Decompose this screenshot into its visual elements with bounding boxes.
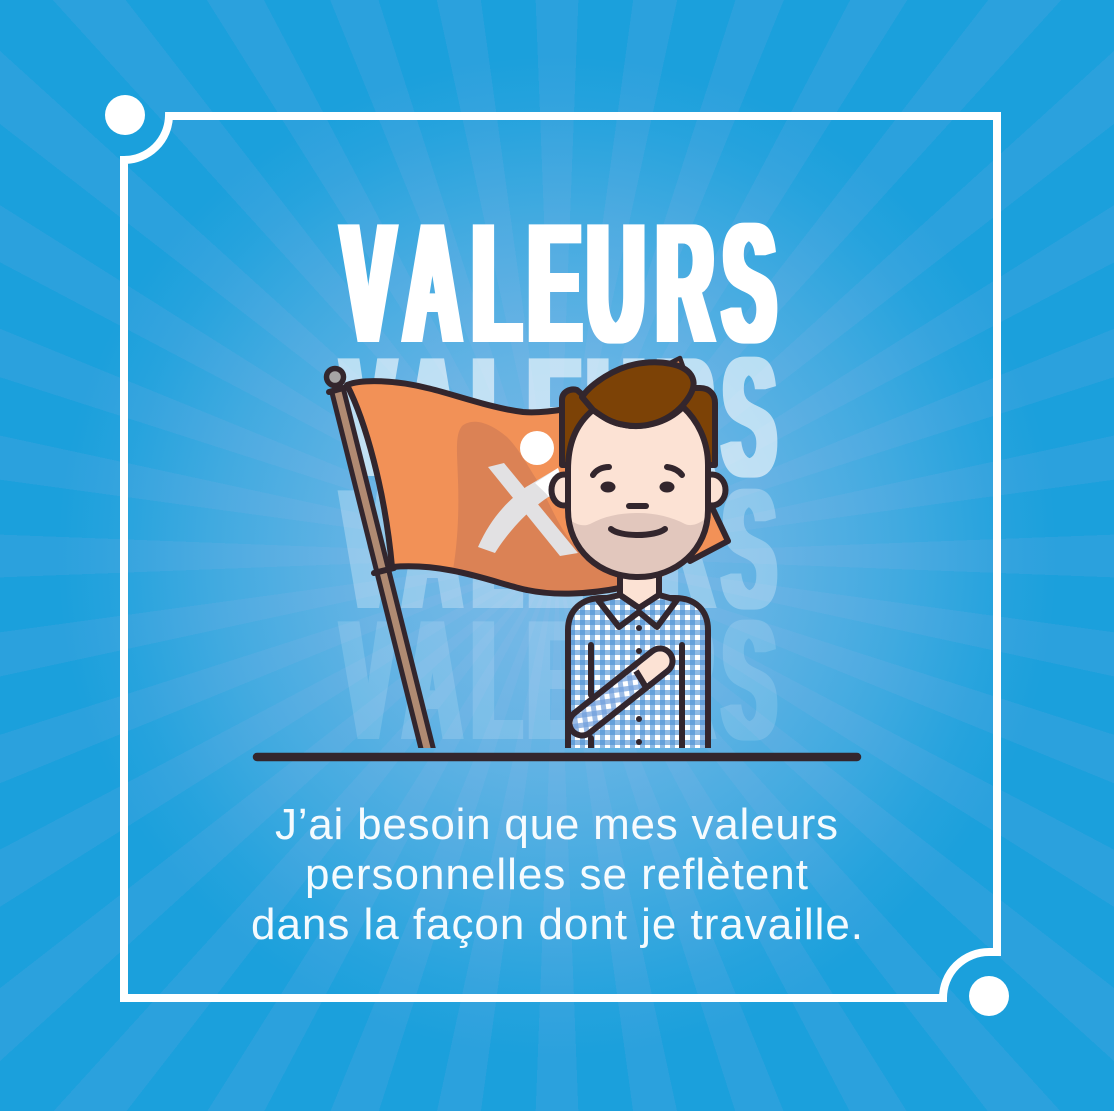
flag shadow fold — [453, 422, 625, 600]
corner dot: bottom right — [969, 976, 1009, 1016]
ground line — [257, 753, 857, 761]
caption — [251, 800, 863, 949]
buttons — [636, 625, 642, 745]
arm lines — [591, 645, 682, 752]
mouth — [611, 529, 665, 535]
arm across chest — [582, 661, 660, 723]
eyes — [600, 482, 674, 492]
hair front swoosh — [582, 362, 694, 426]
pole knob — [326, 368, 344, 386]
beard — [572, 513, 704, 574]
title: VALEURS: VALEURS — [342, 189, 775, 379]
illustration: flag — [326, 368, 730, 752]
flag cloth — [347, 381, 730, 594]
neck — [620, 572, 659, 608]
ghost title 3: VALEURS — [342, 586, 775, 776]
caption line 1: J’ai besoin que mes valeurs — [275, 800, 838, 849]
ears — [552, 474, 726, 506]
pole ring top — [329, 387, 347, 392]
collar — [598, 595, 677, 627]
eyebrows — [593, 467, 682, 475]
infographic canvas — [105, 95, 1009, 1016]
cuff line — [636, 671, 647, 689]
flag logo: X and dot — [478, 431, 578, 556]
flag pole — [337, 388, 428, 752]
hair spike — [668, 358, 685, 372]
hair back — [562, 388, 715, 465]
ghost title 1: VALEURS — [342, 323, 775, 513]
face outline — [568, 407, 708, 577]
flag outline — [347, 381, 728, 594]
caption line 3: dans la façon dont je travaille. — [251, 900, 863, 949]
shirt — [568, 598, 708, 752]
nose — [629, 503, 646, 509]
face — [568, 407, 708, 577]
caption line 2: personnelles se reflètent — [305, 850, 808, 899]
hand — [645, 661, 660, 673]
frame with notched corners — [124, 116, 997, 998]
corner dot: top left — [105, 95, 145, 135]
pole ring bottom — [374, 568, 394, 573]
ghost title 2: VALEURS — [342, 455, 775, 645]
illustration: man — [552, 358, 726, 752]
